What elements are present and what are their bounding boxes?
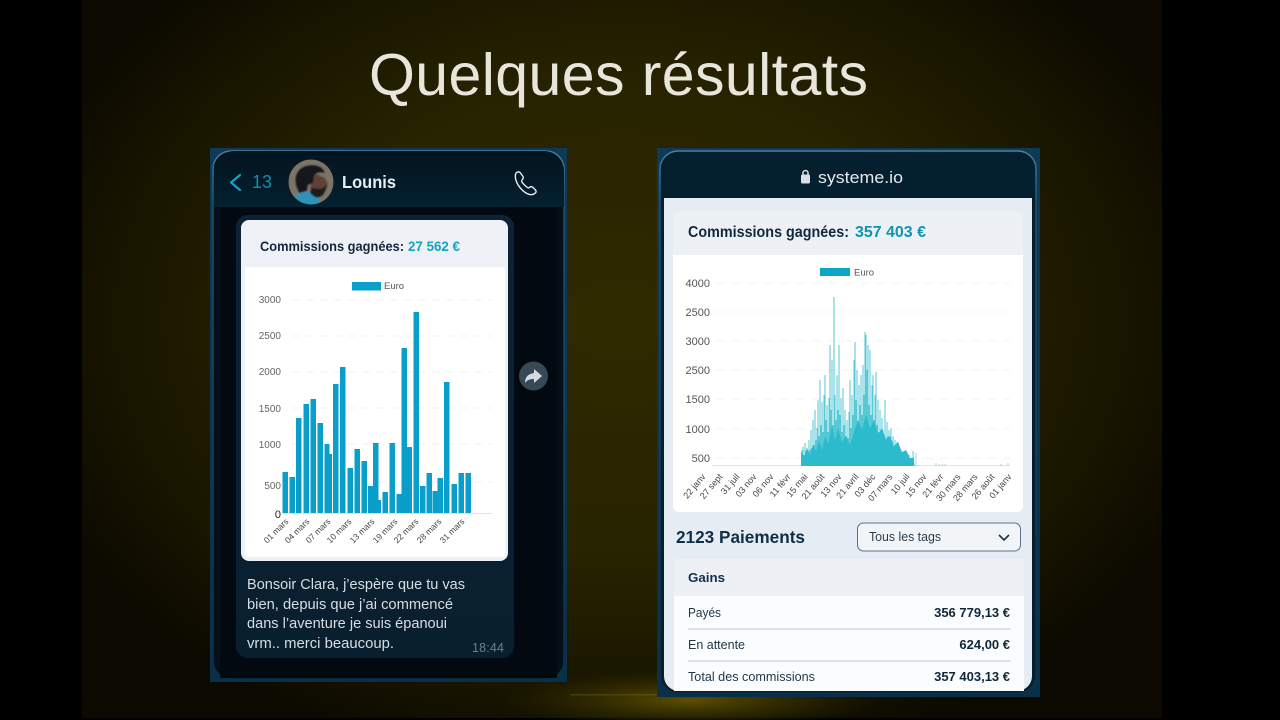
chart legend <box>352 281 404 292</box>
unread count: 13 <box>252 172 272 192</box>
tag dropdown: Tous les tags <box>869 530 941 544</box>
chart data spikes <box>801 297 1008 466</box>
payments count: 2123 Paiements <box>676 527 805 547</box>
title: Quelques résultats <box>369 42 868 108</box>
x axis labels: 30 mars <box>934 471 963 503</box>
y axis labels: 1000 <box>259 440 281 451</box>
row: paid: 356 779,13 € <box>934 605 1010 620</box>
x axis labels <box>681 471 1014 503</box>
y axis labels: 3000 <box>259 295 281 306</box>
x axis labels: 21 avril <box>834 472 861 501</box>
x axis labels: 19 mars <box>371 516 399 545</box>
commission amount: 357 403 € <box>855 224 926 241</box>
card heading: Commissions gagnées: <box>688 224 849 241</box>
icon: back chevron <box>231 175 240 190</box>
message text: bien, depuis que j’ai commencé <box>247 597 453 613</box>
message text: vrm.. merci beaucoup. <box>247 636 394 652</box>
chart legend <box>820 268 874 278</box>
y axis labels: 500 <box>692 453 710 465</box>
y axis labels: 1500 <box>259 404 281 415</box>
y axis labels: 2500 <box>686 365 710 377</box>
x axis labels: 28 mars <box>415 516 443 545</box>
x axis labels: 21 févr <box>920 472 946 499</box>
bars <box>282 312 471 513</box>
y axis labels: 1500 <box>686 394 710 406</box>
bar chart <box>259 281 492 545</box>
chat bubble <box>236 215 514 658</box>
contact name: Lounis <box>342 172 396 192</box>
y axis labels: 2500 <box>259 331 281 342</box>
card heading: Commissions gagnées: <box>260 239 404 254</box>
browser address bar <box>801 168 903 187</box>
earnings table <box>674 559 1024 691</box>
icon: lock <box>801 171 810 184</box>
row: pending <box>688 637 1010 652</box>
chart legend: Euro <box>384 281 404 292</box>
row: paid: Payés <box>688 606 721 620</box>
x axis labels: 31 mars <box>438 516 466 545</box>
area chart <box>681 268 1014 503</box>
dashboard screen <box>664 198 1032 691</box>
y axis labels: 2500 <box>686 307 710 319</box>
message text <box>247 577 465 652</box>
row: total: 357 403,13 € <box>934 669 1010 684</box>
panel: chat phone <box>210 148 567 682</box>
chart legend: Euro <box>854 268 874 278</box>
x axis labels: 27 sept <box>698 471 725 501</box>
x axis labels: 31 juil <box>719 472 742 496</box>
row: pending: 624,00 € <box>959 637 1010 652</box>
x axis labels <box>262 516 466 545</box>
row: paid <box>688 605 1010 620</box>
x axis labels: 04 mars <box>283 516 311 545</box>
x axis labels: 28 mars <box>951 471 980 503</box>
chat header <box>214 151 564 207</box>
x axis labels: 06 nov <box>750 471 776 499</box>
y axis labels: 2000 <box>259 367 281 378</box>
x axis labels: 07 mars <box>866 471 895 503</box>
y axis labels: 500 <box>264 481 281 492</box>
x axis labels: 13 mars <box>348 516 376 545</box>
x axis labels: 01 janv <box>987 471 1014 501</box>
table heading: Gains <box>688 570 725 585</box>
row: pending: En attente <box>688 638 745 652</box>
message text: dans l’aventure je suis épanoui <box>247 616 447 632</box>
tag dropdown <box>858 523 1020 551</box>
x axis labels: 03 déc <box>852 471 878 499</box>
x axis labels: 22 janv <box>681 471 708 501</box>
x axis labels: 10 mars <box>325 516 353 545</box>
x axis labels: 21 août <box>800 471 827 501</box>
commission amount: 27 562 € <box>408 239 460 254</box>
x axis labels: 10 juil <box>889 472 912 496</box>
x axis labels: 15 mai <box>785 472 810 499</box>
row: total <box>688 669 1010 684</box>
site name: systeme.io <box>818 168 903 187</box>
y axis labels: 3000 <box>686 336 710 348</box>
x axis labels: 22 mars <box>392 516 420 545</box>
message text: Bonsoir Clara, j’espère que tu vas <box>247 577 465 593</box>
x axis labels: 03 nov <box>733 471 759 499</box>
x axis labels: 15 nov <box>903 471 929 499</box>
x axis labels: 13 nov <box>818 471 844 499</box>
y axis labels: 1000 <box>686 424 710 436</box>
message time: 18:44 <box>472 641 504 655</box>
x axis labels: 11 févr <box>768 472 793 499</box>
x axis labels: 26 août <box>970 471 997 501</box>
panel: systeme.io phone <box>657 148 1040 697</box>
icon: phone <box>515 172 536 195</box>
commission chart card <box>673 211 1023 512</box>
y axis labels <box>686 278 710 465</box>
y axis labels <box>259 295 281 521</box>
y axis labels: 0 <box>275 509 281 521</box>
icon: forward button <box>519 362 548 390</box>
x axis labels: 07 mars <box>304 516 332 545</box>
x axis labels: 01 mars <box>262 516 290 545</box>
icon: contact avatar <box>288 159 334 207</box>
y axis labels: 4000 <box>686 278 710 290</box>
commission card <box>241 220 508 561</box>
row: total: Total des commissions <box>688 670 815 684</box>
